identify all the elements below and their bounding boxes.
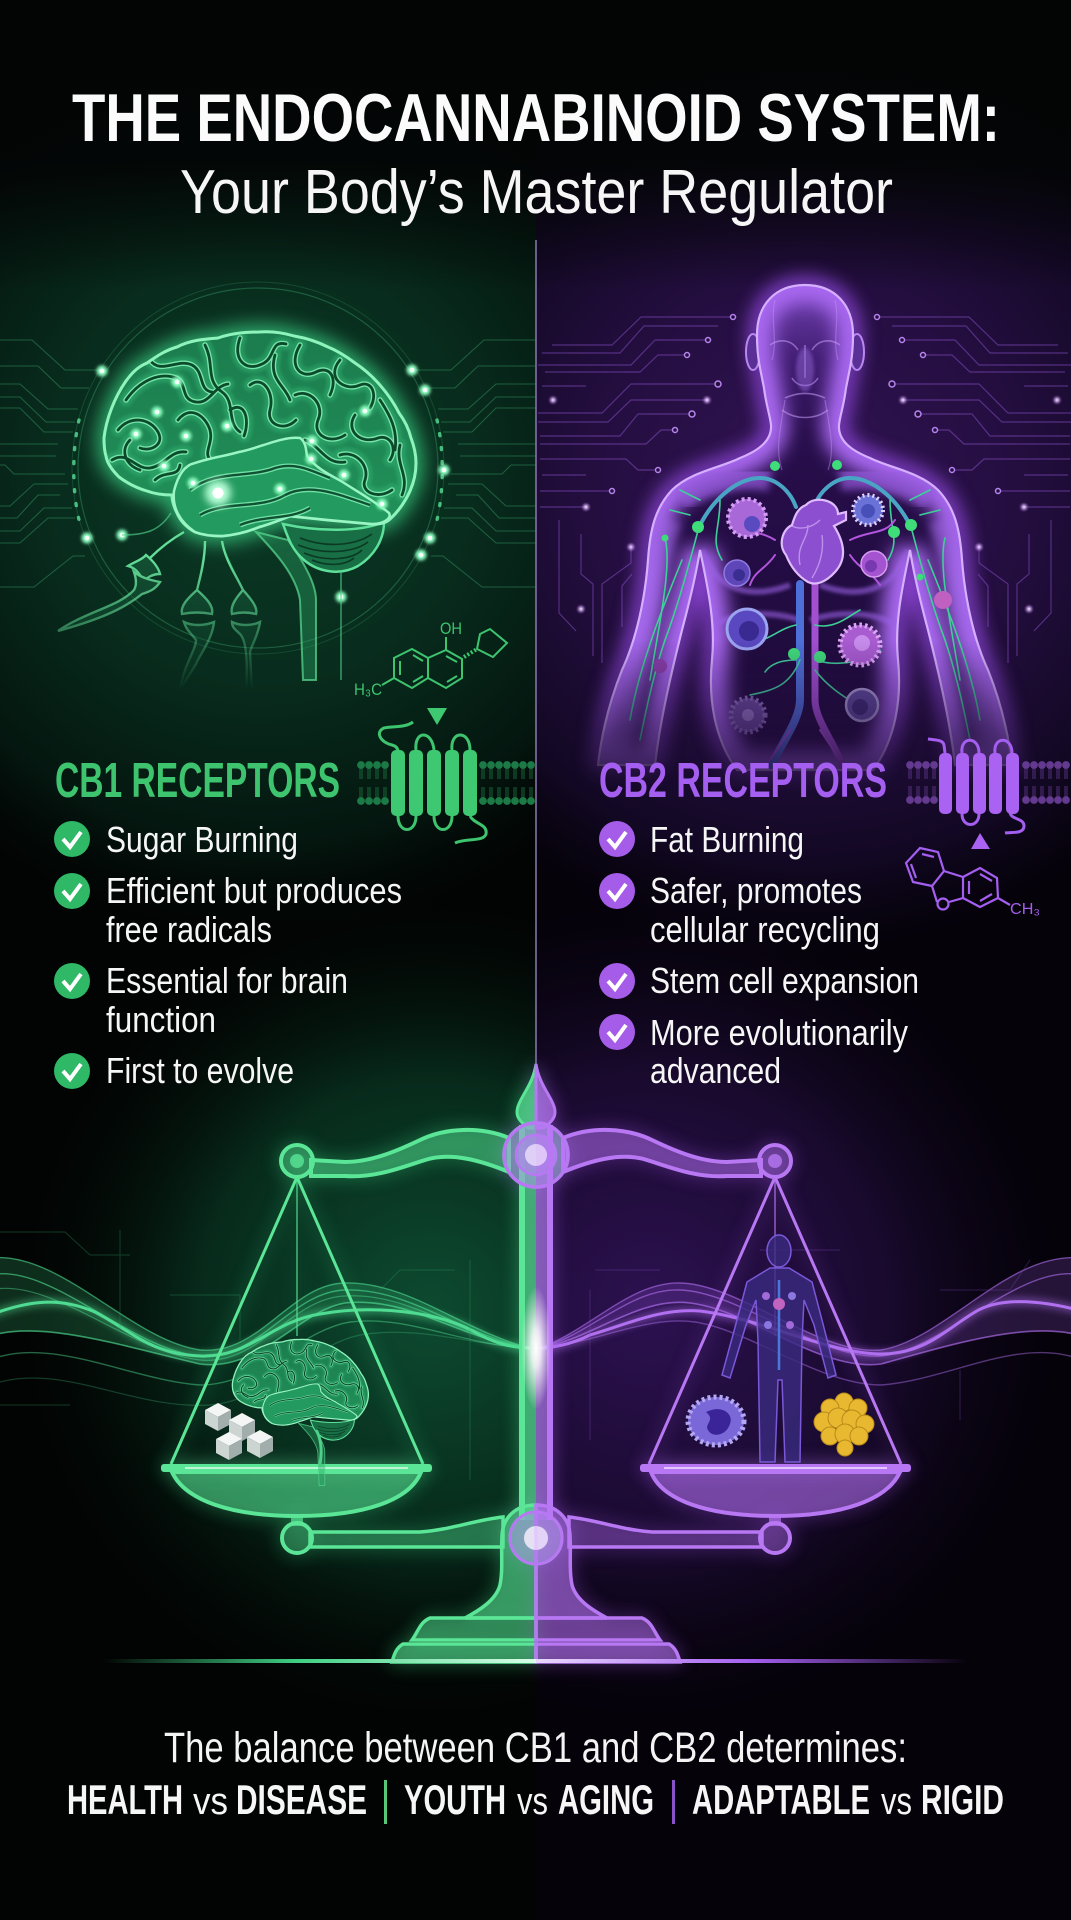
molecule: CB1 ligand: H₃C: [354, 680, 382, 699]
green lymph nodes: [662, 460, 924, 663]
check item: safer: cellular recycling: [650, 909, 880, 950]
check item: efficient: [54, 870, 402, 950]
neurons: [58, 532, 260, 692]
circuit end nodes: [610, 314, 1000, 494]
wave: green: [0, 1257, 530, 1405]
receptor: CB2 membrane protein: [907, 739, 1069, 849]
title: [72, 80, 1000, 227]
check item: safer: Safer, promotes: [650, 870, 862, 911]
list: CB1: [54, 819, 402, 1091]
small immune cell: [688, 1397, 744, 1445]
pan contents: brain and sugar cubes: [205, 1339, 368, 1486]
footer comparisons: YOUTH: [404, 1776, 506, 1823]
check item: efficient: free radicals: [106, 909, 272, 950]
footer comparisons: vs: [881, 1781, 912, 1823]
small brain: [232, 1339, 368, 1486]
check item: fat burning: [599, 819, 804, 860]
check item: sugar burning: [54, 819, 298, 860]
center flare: [521, 1286, 551, 1410]
check item: more evolved: [599, 1012, 908, 1091]
footer comparisons: vs: [517, 1781, 548, 1823]
check item: efficient: Efficient but produces: [106, 870, 402, 911]
circuit lines, brain: [0, 340, 536, 587]
heading: CB2 receptors: CB2 RECEPTORS: [599, 754, 887, 808]
list: CB2: [599, 819, 919, 1091]
footer comparisons: AGING: [558, 1776, 654, 1823]
receptor: CB1 membrane protein: [358, 708, 534, 843]
membrane: [907, 762, 1069, 803]
molecule: CB1 ligand: [354, 619, 507, 699]
wave: purple: [540, 1257, 1071, 1385]
check item: essential: Essential for brain: [106, 960, 348, 1001]
floor glow: [102, 1659, 970, 1663]
footer comparisons: HEALTH: [67, 1776, 183, 1823]
faint circuits behind scale: [0, 1230, 470, 1480]
brain sparkle dots: [82, 364, 450, 602]
molecule: CB1 ligand: OH: [440, 619, 462, 638]
check item: sugar burning: Sugar Burning: [106, 819, 298, 860]
immune cells: [653, 495, 952, 732]
check item: more evolved: advanced: [650, 1050, 781, 1091]
receptor helices: [391, 750, 477, 816]
chest and arm contours: [702, 550, 908, 625]
molecule: CB2 ligand: CH₃: [1010, 901, 1040, 918]
brain: [104, 332, 416, 680]
illustration: purple human body with immune cells: [538, 285, 1071, 770]
brain glow: [104, 332, 416, 536]
receptor helices: [939, 753, 1019, 814]
lymph and vessel network: [630, 478, 980, 765]
fat cluster: [814, 1393, 874, 1456]
check item: essential: function: [106, 999, 216, 1040]
check item: safer: [599, 870, 880, 950]
check item: more evolved: More evolutionarily: [650, 1012, 908, 1053]
wave bundles: [0, 1230, 1071, 1480]
footer comparisons: RIGID: [921, 1776, 1004, 1823]
scale: purple half: [504, 1064, 911, 1662]
center divider line: [535, 240, 537, 1075]
molecule: CB2 ligand: [906, 848, 1040, 918]
binding arrow: [971, 833, 990, 849]
circuit lines, body: [538, 317, 1071, 663]
small body: [722, 1235, 836, 1462]
receptor loops: [928, 739, 1024, 833]
subtitle: Your Body’s Master Regulator: [180, 158, 893, 227]
binding arrow: [427, 708, 447, 725]
check item: fat burning: Fat Burning: [650, 819, 804, 860]
footer comparisons: vs: [193, 1781, 228, 1823]
heading: CB1 receptors: CB1 RECEPTORS: [55, 754, 340, 808]
scale: green half: [161, 1064, 568, 1662]
face: [770, 341, 840, 418]
footer comparisons: [67, 1776, 1004, 1824]
footer statement: The balance between CB1 and CB2 determines:: [164, 1724, 907, 1772]
illustration: green brain with circuit lines: [0, 282, 536, 692]
check item: stem cell: Stem cell expansion: [650, 960, 919, 1001]
membrane: [358, 762, 534, 804]
check item: essential: [54, 960, 348, 1040]
pan contents: body, immune cell and fat: [688, 1235, 874, 1462]
heart: [782, 500, 846, 584]
footer comparisons: ADAPTABLE: [692, 1776, 870, 1823]
scale glow: [161, 1064, 911, 1662]
halo ring: [72, 282, 444, 654]
receptor loops: [379, 722, 486, 843]
check item: first to evolve: [54, 1050, 294, 1091]
sugar cubes: [205, 1403, 273, 1460]
shoulders highlight: [680, 478, 930, 500]
body figure: [598, 285, 1012, 770]
footer comparisons: DISEASE: [236, 1776, 367, 1823]
balance scale: [102, 1064, 970, 1663]
check item: first to evolve: First to evolve: [106, 1050, 294, 1091]
